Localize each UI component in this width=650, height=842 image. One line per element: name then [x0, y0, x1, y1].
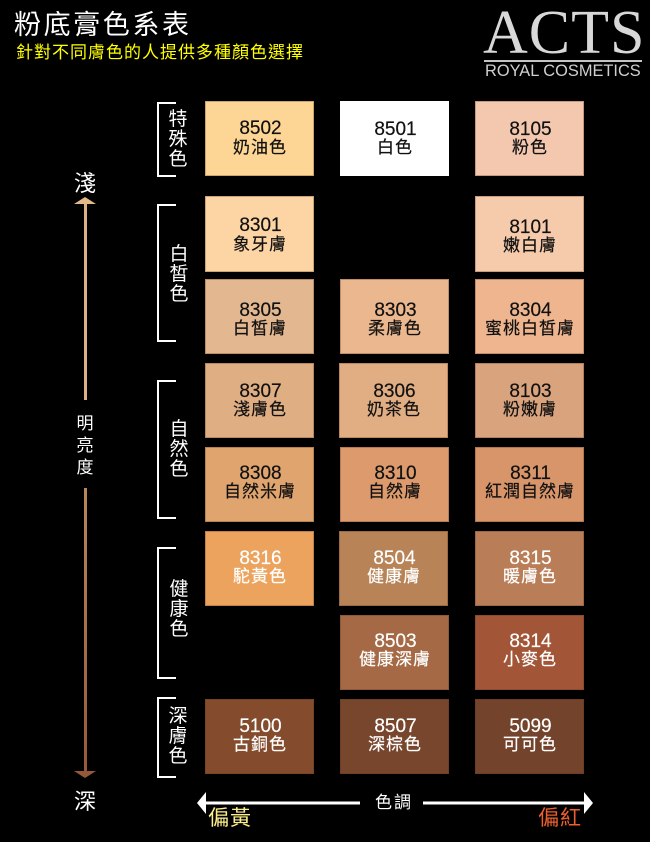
group label: deep: 膚: [168, 726, 188, 747]
swatch 8504: 健康膚: [367, 567, 421, 586]
swatch 5100: [205, 699, 314, 774]
group label: special: 色: [168, 149, 188, 170]
swatch 8308: 自然米膚: [224, 482, 296, 501]
swatch 8301: 象牙膚: [233, 235, 287, 254]
swatch 5100: 古銅色: [233, 735, 287, 754]
group label: deep: 色: [168, 746, 188, 767]
swatch 8311: [475, 447, 584, 522]
swatch 8314: 小麥色: [503, 650, 557, 669]
swatch 8304: 蜜桃白皙膚: [485, 319, 575, 338]
swatch 8501: [340, 101, 449, 176]
label: brightness: [76, 414, 94, 477]
swatch 8503: 健康深膚: [359, 650, 431, 669]
swatch 8305: 8305: [239, 300, 282, 321]
group label: special: 特: [168, 109, 188, 130]
swatch 8308: [205, 447, 314, 522]
swatch 8502: 8502: [239, 118, 282, 139]
group label: fair: 皙: [169, 264, 188, 285]
swatch 8306: [339, 363, 448, 438]
swatch 8507: 深棕色: [368, 735, 422, 754]
swatch 8305: [205, 279, 314, 354]
group bracket: deep: [157, 697, 176, 778]
group label: special: [168, 109, 188, 170]
swatch 8101: 嫩白膚: [503, 236, 557, 255]
swatch 8311: 8311: [510, 463, 551, 484]
subtitle: 針對不同膚色的人提供多種顏色選擇: [16, 43, 304, 62]
swatch 8306: 8306: [373, 381, 416, 402]
logo: ACTS Royal Cosmetics: [483, 0, 645, 80]
swatch 8501: 8501: [374, 119, 417, 140]
swatch 8308: 8308: [239, 463, 282, 484]
swatch 8315: 暖膚色: [503, 567, 557, 586]
label: brightness: 明: [76, 414, 94, 433]
swatch 8303: 8303: [374, 300, 417, 321]
swatch 8103: [475, 363, 584, 438]
swatch 8304: 8304: [509, 300, 552, 321]
swatch 8310: 自然膚: [368, 482, 422, 501]
swatch 8507: [340, 699, 449, 774]
swatch 8314: 8314: [509, 631, 552, 652]
group label: fair: [169, 244, 188, 305]
group label: deep: 深: [168, 706, 188, 727]
swatch 8504: [339, 531, 448, 606]
swatch 8301: [205, 196, 314, 272]
swatch 8105: 8105: [509, 119, 552, 140]
title: 粉底膏色系表: [14, 10, 192, 40]
swatch 8105: 粉色: [512, 138, 548, 157]
swatch 8307: 8307: [239, 381, 282, 402]
swatch 5099: 可可色: [503, 735, 557, 754]
brightness axis: [74, 171, 96, 814]
swatch 8504: 8504: [373, 548, 416, 569]
swatch 8311: 紅潤自然膚: [485, 482, 575, 501]
label: light: 淺: [74, 171, 96, 196]
swatch 8316: 駝黃色: [233, 567, 287, 586]
swatch 8315: [475, 531, 584, 606]
group label: natural: [169, 419, 188, 480]
arrow: down: [74, 488, 96, 778]
arrow: up: [74, 197, 96, 400]
swatch 8314: [475, 615, 584, 690]
swatch 8303: [340, 279, 449, 354]
label: brightness: 亮: [76, 436, 94, 455]
swatch 8103: 8103: [509, 381, 552, 402]
group label: fair: 白: [169, 244, 188, 265]
swatch 8310: [340, 447, 449, 522]
group label: natural: 自: [169, 419, 188, 440]
swatch 8307: 淺膚色: [233, 400, 287, 419]
logo rule: [484, 60, 642, 62]
group bracket: fair: [157, 204, 176, 342]
label: yellowish: 偏黃: [208, 807, 252, 830]
swatch 8105: [475, 101, 584, 176]
swatch 8103: 粉嫩膚: [503, 400, 557, 419]
label: dark: 深: [74, 789, 96, 814]
swatch 8316: [205, 531, 314, 606]
swatch 8303: 柔膚色: [368, 319, 422, 338]
swatch 8304: [475, 279, 584, 354]
group label: healthy: 健: [169, 579, 188, 600]
label: brightness: 度: [76, 458, 94, 477]
swatch 8502: 奶油色: [233, 138, 287, 157]
group label: deep: [168, 706, 188, 767]
group bracket: special: [157, 102, 176, 177]
group bracket: natural: [157, 380, 176, 519]
swatch 8101: [475, 196, 584, 272]
group label: healthy: [169, 579, 188, 640]
swatch 8507: 8507: [374, 716, 417, 737]
label: tone: 色調: [375, 793, 413, 812]
logo wordmark: ACTS: [483, 0, 645, 67]
arrow: toward red: [423, 792, 593, 814]
group label: natural: 然: [169, 439, 188, 460]
swatch 8502: [205, 101, 314, 176]
swatch 8503: [340, 615, 449, 690]
swatch 8310: 8310: [374, 463, 417, 484]
group label: healthy: 康: [169, 599, 188, 620]
group label: special: 殊: [168, 129, 188, 150]
group label: fair: 色: [169, 284, 188, 305]
swatch 8316: 8316: [239, 548, 282, 569]
group label: healthy: 色: [169, 619, 188, 640]
swatch 8301: 8301: [239, 215, 282, 236]
swatch 8305: 白皙膚: [233, 319, 287, 338]
swatch 5100: 5100: [239, 716, 282, 737]
swatch 5099: 5099: [509, 716, 552, 737]
swatch 8307: [205, 363, 314, 438]
swatch 8501: 白色: [377, 138, 413, 157]
swatch 5099: [475, 699, 584, 774]
group bracket: healthy: [157, 547, 176, 679]
swatch 8503: 8503: [374, 631, 417, 652]
swatch 8315: 8315: [509, 548, 552, 569]
logo tagline: ROYAL COSMETICS: [485, 62, 641, 80]
label: reddish: 偏紅: [538, 807, 582, 830]
swatch 8101: 8101: [509, 217, 552, 238]
group label: natural: 色: [169, 459, 188, 480]
swatch 8306: 奶茶色: [367, 400, 421, 419]
arrow: toward yellow: [197, 792, 360, 814]
